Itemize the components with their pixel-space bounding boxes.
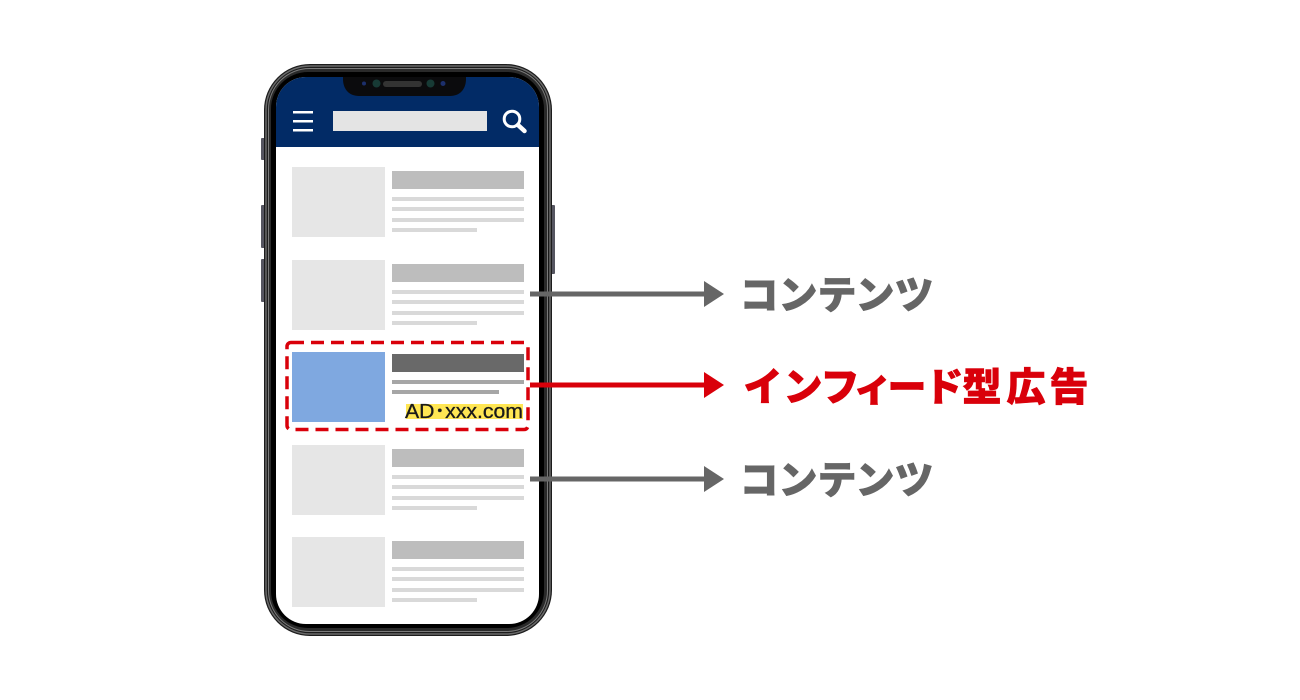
notch with camera and speaker <box>343 77 466 96</box>
arrow: content lower <box>530 466 724 492</box>
ad title <box>392 354 524 372</box>
content row 1 <box>292 167 524 237</box>
content row 2 <box>292 260 524 330</box>
phone body <box>261 64 555 636</box>
ad thumbnail <box>292 352 385 422</box>
content row 5 <box>292 537 524 607</box>
arrow: ad <box>530 372 724 398</box>
app header bar <box>276 77 539 147</box>
search bar <box>333 111 487 131</box>
dashed highlight around ad <box>287 342 528 430</box>
in-feed ad row <box>292 352 524 423</box>
label: content lower: コンテンツ <box>739 460 934 503</box>
arrow: content upper <box>530 281 724 307</box>
ad text lines <box>392 380 524 394</box>
label: in-feed ad: インフィード型広告 <box>743 367 1089 410</box>
icon: hamburger menu <box>293 111 313 132</box>
content row 4 <box>292 445 524 515</box>
ad domain label: AD･xxx.com <box>405 401 523 423</box>
label: content upper: コンテンツ <box>739 275 934 318</box>
icon: magnifying glass <box>504 111 524 131</box>
